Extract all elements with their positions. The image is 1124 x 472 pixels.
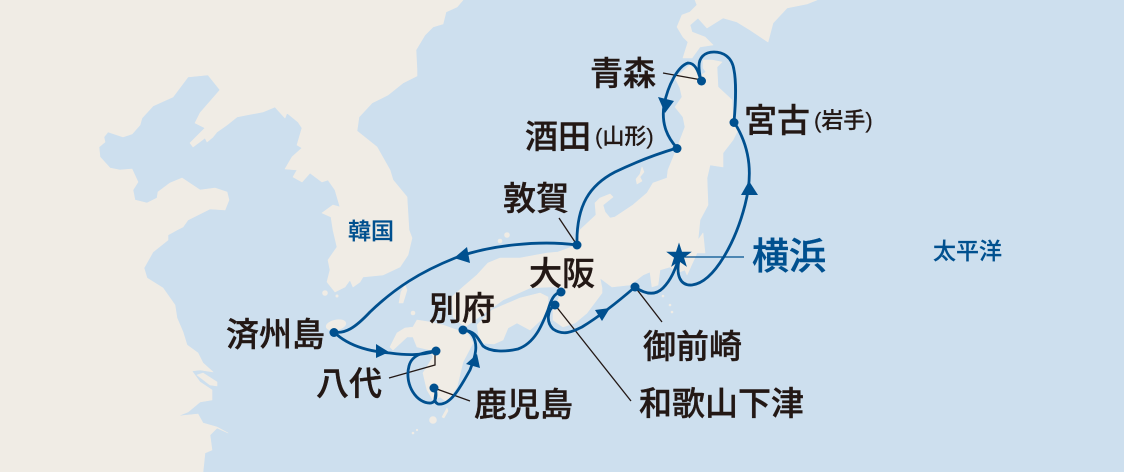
land: Changjiang island — [197, 373, 217, 386]
land: small islands — [322, 232, 673, 434]
label: Osaka: 大阪 — [529, 255, 595, 292]
label: Aomori: 青森 — [590, 55, 656, 92]
label: Pacific Ocean: 太平洋 — [933, 238, 1002, 264]
land: Jeju — [325, 318, 347, 332]
label: Yatsushiro: 八代 — [316, 365, 382, 402]
place labels — [226, 55, 1002, 423]
label: Yokohama: 横浜 — [752, 236, 826, 277]
icon: star at Yokohama — [666, 242, 692, 267]
leader: Yokohama — [679, 256, 744, 258]
label: Tsuruga: 敦賀 — [503, 180, 569, 217]
leader lines — [389, 73, 744, 401]
label: Miyako: (岩手) — [814, 108, 873, 133]
land: Honshu — [452, 60, 738, 327]
label: Korea: 韓国 — [348, 218, 394, 244]
cruise route — [334, 52, 749, 404]
land: Asian mainland and Korea — [0, 0, 463, 472]
land: Hokkaido — [677, 0, 817, 58]
land: Tsushima — [399, 285, 407, 303]
label: Beppu: 別府 — [429, 290, 495, 327]
label: Wakayama-Shimotsu: 和歌山下津 — [639, 385, 804, 422]
land: Tanegashima — [442, 408, 448, 418]
map: land masses — [0, 0, 817, 472]
label: Kagoshima: 鹿児島 — [474, 386, 573, 423]
label: Sakata: (山形) — [595, 124, 654, 149]
port markers — [330, 76, 738, 392]
land: Yakushima — [430, 416, 436, 424]
label: Omaezaki: 御前崎 — [643, 328, 742, 365]
label: Sakata: 酒田 — [525, 118, 591, 155]
land: Sado — [636, 167, 644, 184]
land: Shikoku — [477, 293, 548, 344]
label: Jeju: 済州島 — [226, 316, 325, 353]
label: Miyako: 宮古 — [744, 102, 810, 139]
land: Kyushu — [390, 320, 473, 402]
route direction arrows — [376, 97, 758, 368]
